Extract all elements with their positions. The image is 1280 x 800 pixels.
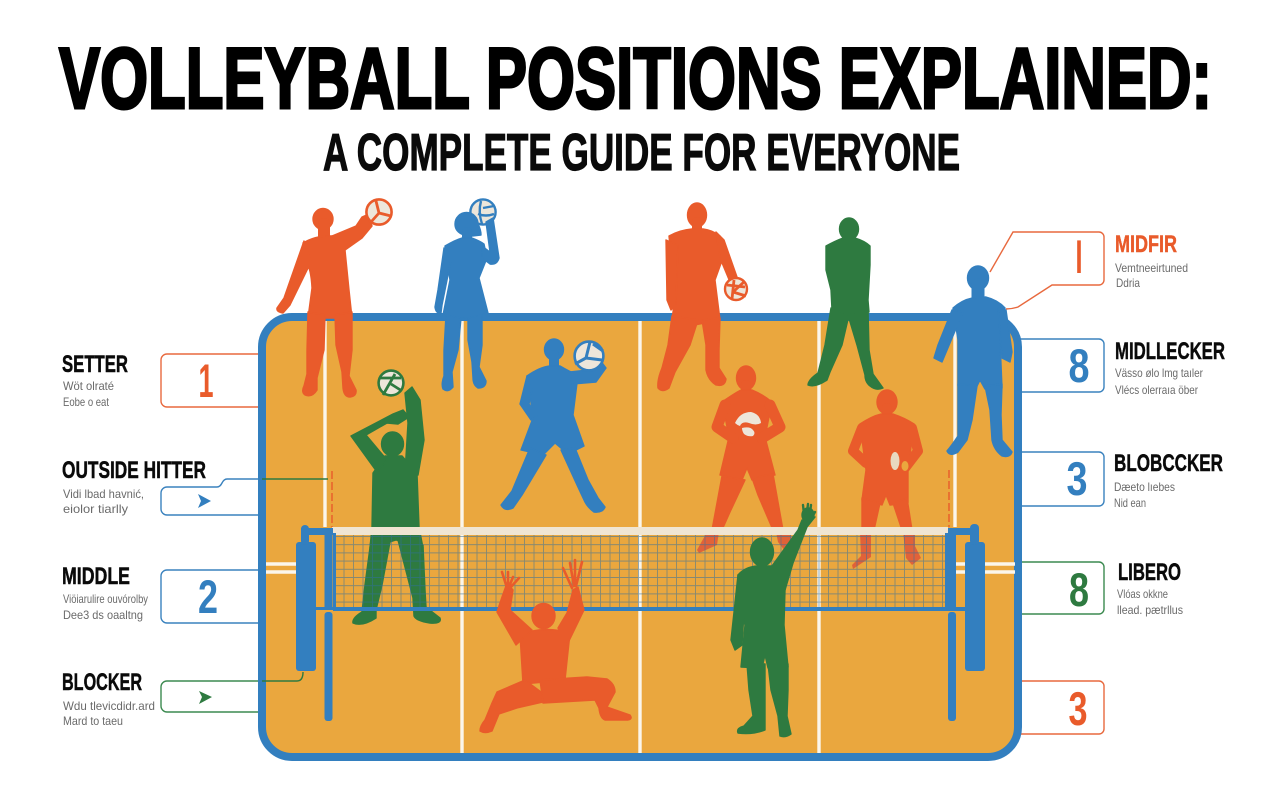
net post left: [296, 525, 333, 721]
callout: setter: Eobe o eat: [63, 395, 110, 409]
callout: libero: Vlóas okkne: [1117, 587, 1168, 601]
player: orange holding ball at hip: [853, 390, 918, 530]
callout: middle: 2: [198, 570, 218, 623]
callout: midllecker: 8: [1068, 339, 1090, 392]
icon: volleyball blue held by head: [470, 199, 496, 225]
callout: midfir: Ddria: [1116, 276, 1140, 290]
player: orange holding ball at chest: [712, 366, 783, 530]
player: green serving: [351, 387, 440, 624]
net: [316, 527, 965, 611]
player: blue at right edge: [934, 266, 1012, 456]
player: server orange: [277, 208, 372, 397]
player: orange with low ball: [658, 203, 737, 390]
player: blue with ball: [501, 339, 606, 512]
connector: blocker: [262, 672, 303, 681]
callout: setter: [62, 351, 262, 409]
callout: setter: SETTER: [62, 351, 128, 378]
callout: outside hitter: eiolor tiarlly: [63, 502, 128, 516]
callout: midfir: I: [1076, 230, 1082, 283]
callout: midllecker: Vlécs olerraıa öber: [1115, 383, 1198, 397]
subtitle: A COMPLETE GUIDE FOR EVERYONE: [323, 124, 960, 182]
callout: middle: Viöiarulire ouvórolby: [63, 592, 148, 606]
callout: blobcker: Dæeto lıebes: [1114, 480, 1175, 494]
callout: libero: [1018, 559, 1183, 617]
callout: unlabelled three: [1018, 681, 1104, 735]
callout: middle: [62, 563, 262, 623]
net post right: [948, 524, 985, 721]
callout: midfir: [990, 230, 1188, 309]
player feet behind net: [697, 532, 921, 569]
callout: outside hitter: OUTSIDE HITTER: [62, 457, 206, 484]
callout: blocker: [62, 669, 262, 728]
callout: middle: Dee3 ds oaaltng: [63, 608, 143, 622]
connector: outside hitter: [262, 478, 328, 480]
callout: blocker: Wdu tlevicdidr.ard: [63, 699, 155, 713]
callout: midfir: Vemtneeirtuned: [1115, 261, 1188, 275]
callout: setter: Wöt olraté: [63, 379, 114, 393]
callout: midllecker: [1018, 338, 1225, 397]
player: blue woman: [435, 213, 499, 391]
icon: volleyball orange held high: [366, 199, 392, 225]
callout: blobcker: 3: [1066, 452, 1088, 505]
panel: court: [262, 317, 1018, 757]
player: orange crouching blocker: [480, 560, 631, 732]
icon: volleyball orange low: [725, 278, 747, 300]
callout: setter: 1: [198, 354, 214, 407]
callout: midllecker: Vässo ølo lmg taıler: [1115, 366, 1203, 380]
callout: libero: LIBERO: [1118, 559, 1181, 586]
icon: volleyball blue: [575, 342, 603, 370]
callout: middle: MIDDLE: [62, 563, 130, 590]
callout: blocker: Mard to taeu: [63, 714, 123, 728]
player: green standing: [808, 218, 883, 389]
player: green reaching: [731, 504, 815, 737]
callout: blobcker: BLOBCCKER: [1114, 450, 1223, 477]
callout: outside hitter: Vidi lbad havnić,: [63, 487, 144, 501]
callout: libero: llead. pætrllus: [1117, 603, 1183, 617]
callout: unlabelled three: 3: [1068, 682, 1088, 735]
callout: outside hitter: [62, 457, 262, 516]
callout: blocker: BLOCKER: [62, 669, 142, 696]
callout: blobcker: [1018, 450, 1223, 510]
icon: volleyball green: [379, 371, 403, 395]
callout: blobcker: Nid ean: [1114, 496, 1146, 510]
callout: midllecker: MIDLLECKER: [1115, 338, 1225, 365]
callout: libero: 8: [1069, 563, 1089, 616]
callout: midfir: MIDFIR: [1115, 231, 1177, 258]
